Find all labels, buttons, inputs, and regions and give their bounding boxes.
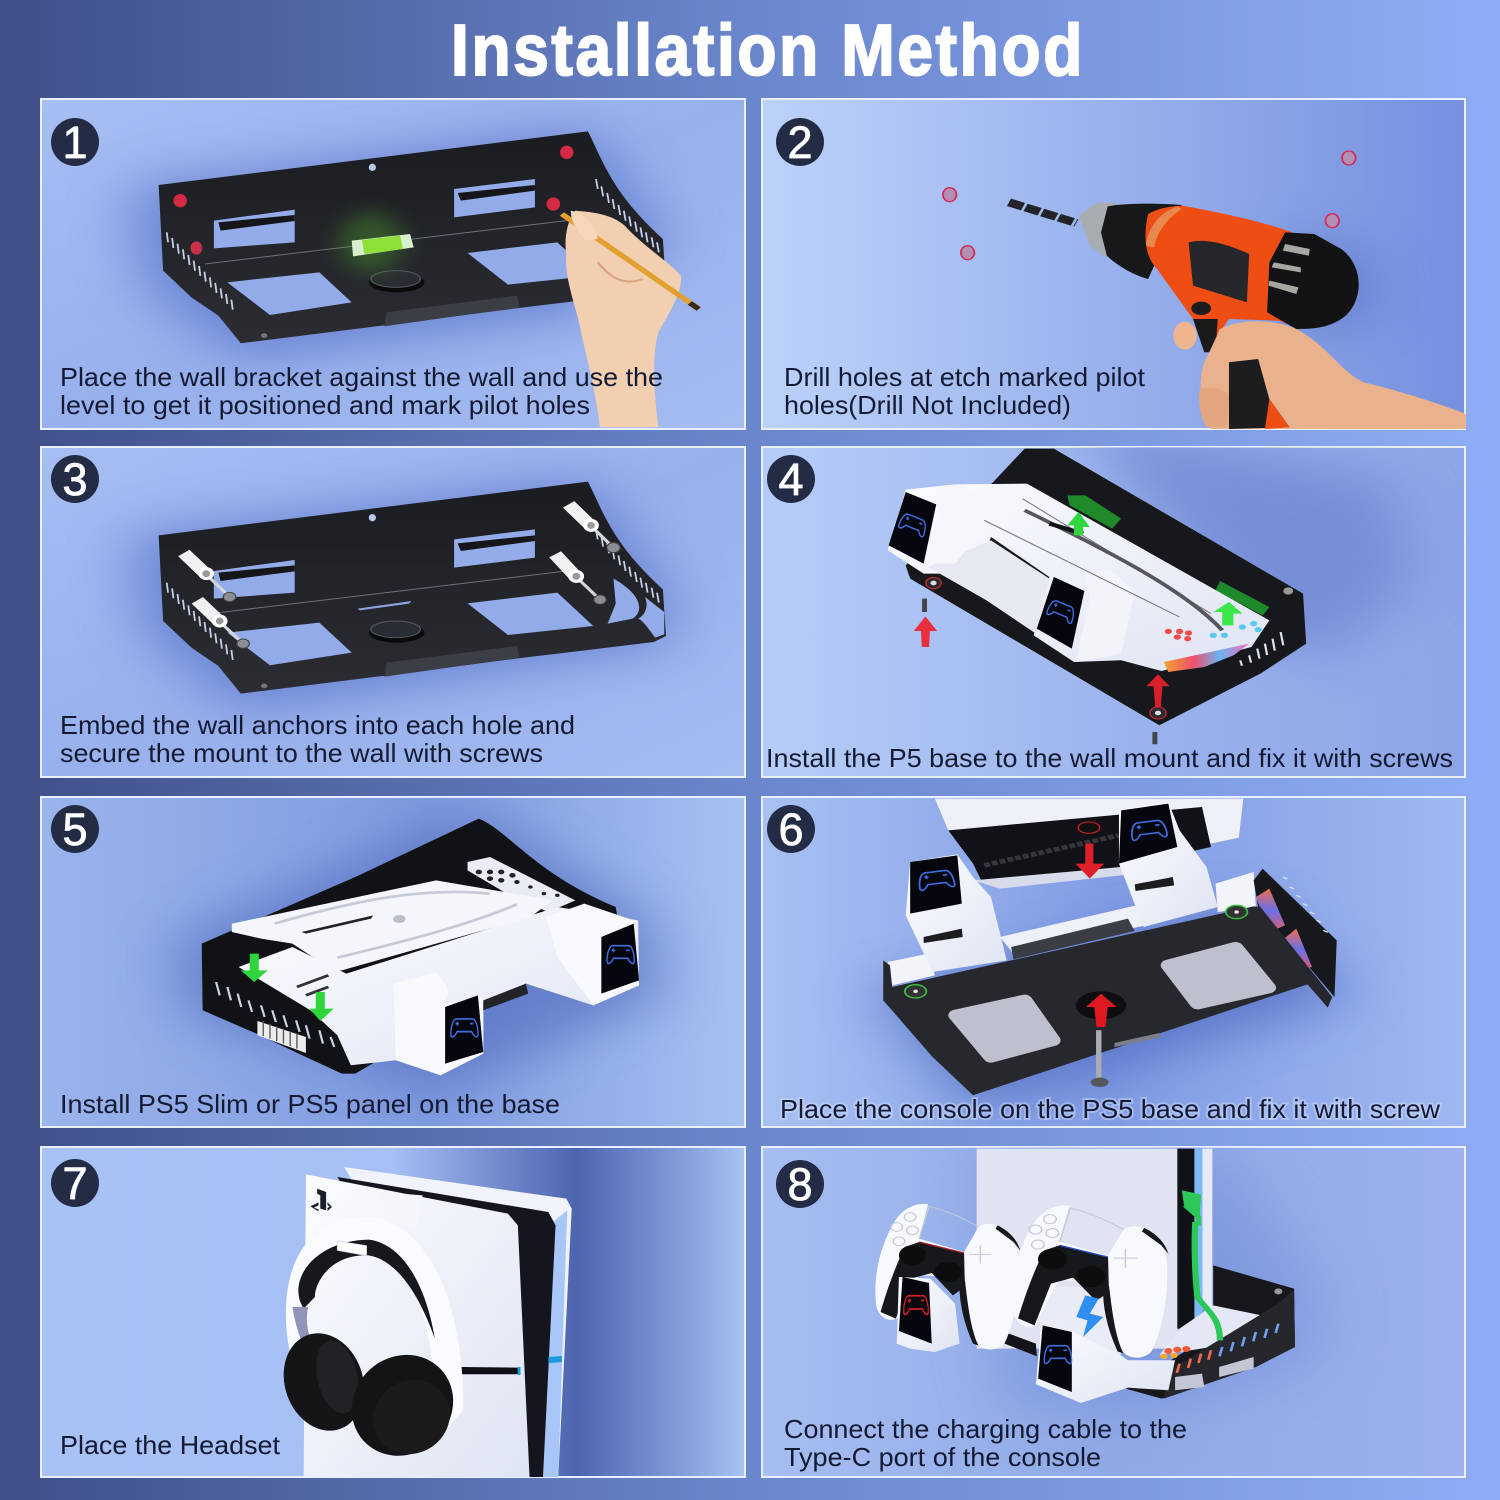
caption 2: Drill holes at etch marked pilot bbox=[784, 362, 1146, 392]
right controller bbox=[1012, 1205, 1168, 1358]
caption 1 bbox=[60, 362, 663, 420]
caption 8 bbox=[784, 1414, 1187, 1472]
badge 5 bbox=[51, 804, 99, 855]
panel: step 3 bbox=[41, 447, 745, 777]
badge 7: 7 bbox=[62, 1158, 88, 1209]
caption 8: Connect the charging cable to the bbox=[784, 1414, 1187, 1444]
PS logo bbox=[310, 1189, 332, 1211]
badge 1 bbox=[51, 117, 99, 168]
badge 8: 8 bbox=[787, 1159, 813, 1210]
console, base underside and screw bbox=[870, 799, 1355, 1114]
pilot holes and drill bbox=[943, 151, 1466, 429]
panel: step 4 bbox=[762, 414, 1465, 777]
badge 6 bbox=[767, 804, 815, 855]
badge 1: 1 bbox=[62, 117, 88, 168]
console with headset bbox=[276, 1167, 572, 1477]
badge 4 bbox=[767, 454, 815, 505]
bracket with anchors bbox=[131, 480, 670, 710]
panel: step 2 bbox=[762, 99, 1466, 429]
left controller bbox=[875, 1204, 1020, 1350]
caption 2: holes(Drill Not Included) bbox=[784, 390, 1071, 420]
bracket with level and hand bbox=[131, 129, 699, 427]
caption 5: Install PS5 Slim or PS5 panel on the base bbox=[60, 1089, 560, 1119]
panel: step 1 bbox=[41, 99, 745, 429]
caption 3: secure the mount to the wall with screws bbox=[60, 738, 543, 768]
badge 8 bbox=[776, 1159, 824, 1210]
caption 3 bbox=[60, 710, 575, 768]
caption 7: Place the Headset bbox=[60, 1430, 281, 1460]
panel: step 5 bbox=[41, 797, 745, 1127]
right charger tower bbox=[1031, 1287, 1121, 1355]
badge 6: 6 bbox=[778, 804, 804, 855]
caption 1: level to get it positioned and mark pilot holes bbox=[60, 390, 590, 420]
caption 6: Place the console on the PS5 base and fix it with screw bbox=[780, 1094, 1440, 1124]
panel: step 6 bbox=[762, 797, 1465, 1127]
badge 7 bbox=[51, 1158, 99, 1209]
panel: step 8 bbox=[762, 1147, 1465, 1477]
controllers on wall-mounted console bbox=[875, 1149, 1319, 1414]
badge 2: 2 bbox=[787, 117, 813, 168]
caption 1: Place the wall bracket against the wall and use the bbox=[60, 362, 663, 392]
base on mount bbox=[888, 414, 1413, 744]
badge 3 bbox=[51, 454, 99, 505]
caption 2 bbox=[784, 362, 1146, 420]
caption 4: Install the P5 base to the wall mount and fix it with screws bbox=[766, 743, 1453, 773]
badge 3: 3 bbox=[62, 454, 88, 505]
title: Installation Method bbox=[451, 11, 1085, 91]
panel: step 7 bbox=[41, 1147, 745, 1477]
caption 8: Type-C port of the console bbox=[784, 1442, 1101, 1472]
caption 3: Embed the wall anchors into each hole and bbox=[60, 710, 575, 740]
badge 4: 4 bbox=[778, 454, 804, 505]
badge 2 bbox=[776, 117, 824, 168]
badge 5: 5 bbox=[62, 804, 88, 855]
console panel on base bbox=[176, 810, 661, 1090]
